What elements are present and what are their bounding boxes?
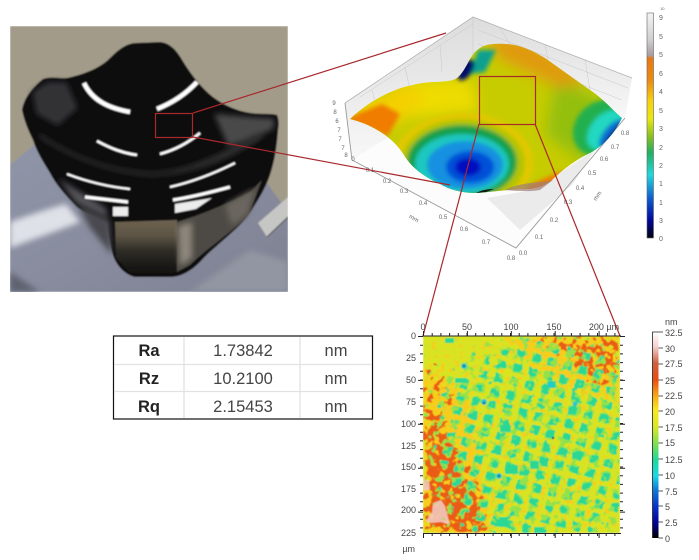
table row: Ra: 1.73842 (213, 342, 273, 360)
axis labels: 8 (333, 110, 337, 116)
colour bar: 3D height scale (647, 6, 665, 243)
colour bar: 3D height scale: 5 (659, 108, 663, 115)
heat map x-axis labels (420, 322, 619, 332)
colour bar: 3D height scale: 1 (659, 200, 663, 207)
heat map y-axis labels: 25 (406, 353, 416, 363)
axis labels: 0.4 (576, 186, 585, 192)
axis labels: 0.8 (621, 131, 630, 137)
colour bar: nanometre scale: 12.5 (665, 455, 683, 465)
axis labels: mm (408, 214, 419, 224)
colour bar: nanometre scale: 22.5 (665, 391, 683, 401)
axis labels: 0.0 (519, 251, 528, 257)
table row: Rz: Rz (139, 370, 159, 388)
table row: Ra: nm (325, 342, 347, 360)
table row: Rq (138, 398, 347, 416)
axis labels: 0.3 (400, 189, 409, 195)
icon: light reflections (67, 82, 235, 202)
colour bar: nanometre scale: 32.5 (665, 328, 683, 338)
heat map y-axis labels: 0 (411, 331, 416, 341)
heat map y-axis labels (401, 331, 416, 554)
colour bar: nanometre scale (652, 317, 683, 544)
axis labels: 0.8 (507, 256, 516, 262)
table row: Ra: Ra (138, 342, 160, 360)
heat map x-axis labels: 50 (462, 322, 472, 332)
colour bar: 3D height scale: 5 (659, 34, 663, 41)
roughness table (114, 336, 372, 419)
axis labels: 0.2 (550, 218, 559, 224)
axis labels: 0.5 (439, 215, 448, 221)
plot walls and floor (345, 17, 632, 248)
table row: Rz: 10.2100 (213, 370, 273, 388)
table row: Rz: nm (325, 370, 347, 388)
colour bar: 3D height scale: 0 (659, 236, 663, 243)
heat map y-axis labels: 200 (401, 505, 416, 515)
colour bar: 3D height scale: 3 (659, 218, 663, 225)
axis labels: 7 (338, 137, 342, 143)
axis labels: 7 (337, 128, 341, 134)
colour bar: nanometre scale: nm (665, 317, 678, 327)
heat map y-axis labels: 175 (401, 484, 416, 494)
axis labels: 0.6 (460, 227, 469, 233)
colour bar: 3D height scale: 3 (659, 126, 663, 133)
table row: Rq: Rq (138, 398, 160, 416)
axis labels: 0.7 (482, 240, 491, 246)
axis labels: 0.2 (383, 179, 392, 185)
colour bar: 3D height scale: 9 (659, 15, 663, 22)
colour bar: 3D height scale: 2 (659, 145, 663, 152)
callout lines: 3D plot to roughness map (423, 76, 620, 336)
colour bar: nanometre scale: 20 (665, 407, 675, 417)
colour bar: nanometre scale: 10 (665, 471, 675, 481)
axis labels: 0.5 (588, 171, 597, 177)
table row: Rq: nm (325, 398, 347, 416)
heat map x-axis labels: 150 (546, 322, 562, 332)
colour bar: 3D height scale: 2 (659, 163, 663, 170)
colour bar: 3D height scale: 1 (659, 181, 663, 188)
heat map y-axis labels: 75 (406, 397, 416, 407)
colour bar: nanometre scale: 5 (665, 502, 670, 512)
axis labels: 8 (344, 153, 348, 159)
heat map y-axis labels: 50 (406, 375, 416, 385)
colour bar: nanometre scale: 0 (665, 534, 670, 544)
axis labels: mm (593, 191, 604, 202)
heat map axis ticks (420, 334, 622, 536)
axis labels (332, 101, 630, 262)
axis labels: 0.3 (564, 200, 573, 206)
heat map x-axis labels: 200 µm (589, 322, 619, 332)
table row: Rz (139, 370, 347, 388)
colour bar: 3D height scale: 6 (659, 71, 663, 78)
colour bar: 3D height scale: 4 (659, 89, 663, 96)
axis labels: 6 (335, 119, 339, 125)
axis labels: 0 (351, 157, 355, 163)
axis labels: 7 (341, 146, 345, 152)
colour bar: nanometre scale: 25 (665, 376, 675, 386)
colour bar: nanometre scale: 15 (665, 438, 675, 448)
callout lines: photo to 3D plot (156, 33, 450, 185)
heat map y-axis labels: µm (402, 544, 415, 554)
photo: polished black workpiece on steel fixture (10, 26, 288, 292)
table row: Rq: 2.15453 (213, 398, 273, 416)
colour bar: 3D height scale: 5 (659, 52, 663, 59)
heat map y-axis labels: 150 (401, 462, 416, 472)
colour bar: nanometre scale: 7.5 (665, 487, 678, 497)
colour bar: nanometre scale: 27.5 (665, 359, 683, 369)
colour bar: 3D height scale: 10 (660, 6, 665, 11)
axis labels: 9 (332, 101, 336, 107)
colour bar: nanometre scale: 17.5 (665, 423, 683, 433)
3D surface plot (330, 17, 650, 262)
table row: Ra (138, 342, 347, 360)
axis labels: 0.1 (535, 235, 544, 241)
heat map: nanoscale surface roughness (401, 322, 622, 554)
axis labels: 0.1 (366, 168, 375, 174)
heat map x-axis labels: 0 (420, 322, 426, 332)
heat map y-axis labels: 100 (401, 419, 416, 429)
colour bar: nanometre scale: 2.5 (665, 518, 678, 528)
heat map x-axis labels: 100 (503, 322, 519, 332)
heat map y-axis labels: 225 (401, 528, 416, 538)
blue pits (445, 338, 582, 533)
surface: coloured height map (350, 44, 622, 193)
colour bar: nanometre scale: 30 (665, 344, 675, 354)
axis labels: 0.6 (600, 157, 609, 163)
axis labels: 0.7 (611, 145, 620, 151)
heat map y-axis labels: 125 (401, 441, 416, 451)
axis labels: 0.4 (419, 201, 428, 207)
surface fold shadow (505, 180, 553, 191)
